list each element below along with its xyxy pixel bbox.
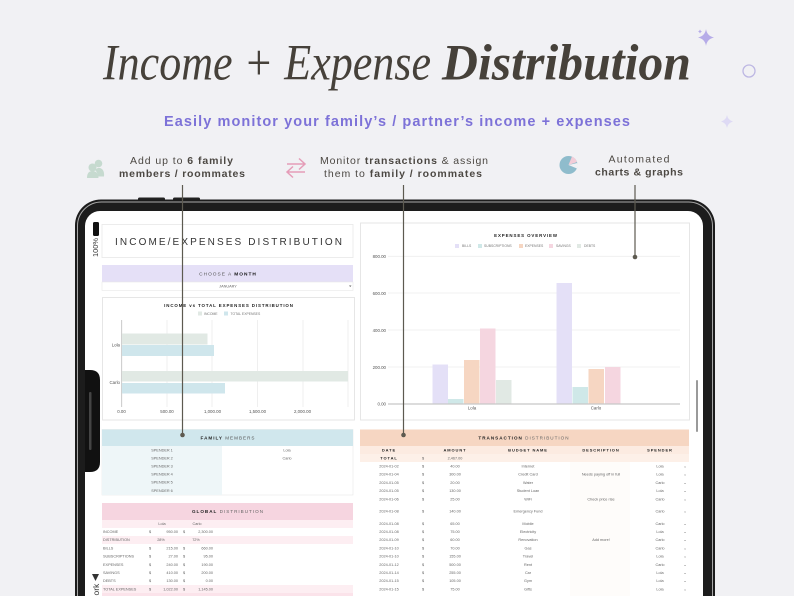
table rows: Carlo xyxy=(655,522,665,526)
panel: global distribution: $ xyxy=(183,530,186,534)
table rows: ⌄ xyxy=(683,497,687,501)
panel: global distribution: SUBSCRIPTIONS xyxy=(103,555,134,559)
panel: family members xyxy=(102,430,353,495)
panel: global distribution: BILLS xyxy=(103,546,114,550)
table rows: 20.00 xyxy=(450,481,460,485)
table rows: $ xyxy=(422,555,425,559)
table rows: Lola xyxy=(656,489,664,493)
table rows: ⌄ xyxy=(683,563,687,567)
tablet device xyxy=(75,198,715,596)
table rows: $ xyxy=(422,530,425,534)
callout line: transactions xyxy=(401,185,406,437)
table rows: Check price rise xyxy=(587,497,615,501)
table rows: Gym xyxy=(524,579,532,583)
table rows: 60.00 xyxy=(450,538,460,542)
table rows: $ xyxy=(422,563,425,567)
panel: transaction distribution: TRANSACTION DISTRIBUTION xyxy=(478,436,570,440)
column chart: 400.00 xyxy=(373,328,387,333)
panel: family members: SPENDER 4 xyxy=(151,473,173,477)
panel: global distribution: 200.00 xyxy=(201,571,213,575)
panel: global distribution: GLOBAL DISTRIBUTION xyxy=(192,509,264,514)
panel: family members: Carlo xyxy=(282,456,292,460)
table rows: $ xyxy=(422,481,425,485)
panel: transaction distribution xyxy=(360,430,689,596)
table rows: 2024-01-15 xyxy=(379,579,399,583)
panel: global distribution: 130.00 xyxy=(166,579,178,583)
table rows: 2024-01-05 xyxy=(379,489,399,493)
table rows: ⌄ xyxy=(683,555,687,559)
month selector: JANUARY xyxy=(219,284,237,288)
status bar: battery xyxy=(91,222,100,257)
panel: family members: SPENDER 3 xyxy=(151,464,173,468)
scrollbar xyxy=(696,380,698,432)
table rows: 2024-01-14 xyxy=(379,571,399,575)
panel: global distribution: $ xyxy=(183,546,186,550)
panel: global distribution: 0.00 xyxy=(206,579,213,583)
panel: global distribution: $ xyxy=(149,579,152,583)
table rows: Student Loan xyxy=(517,489,539,493)
table rows: Car xyxy=(525,571,532,575)
table rows: 2024-01-09 xyxy=(379,538,399,542)
title: Income + Expense xyxy=(102,36,431,92)
table rows: ⌄ xyxy=(683,473,687,477)
table rows: ⌄ xyxy=(683,579,687,583)
panel: family members: SPENDER 2 xyxy=(151,456,173,460)
table rows: $ xyxy=(422,489,425,493)
table rows: $ xyxy=(422,571,425,575)
table rows: $ xyxy=(422,538,425,542)
panel: global distribution: 28% xyxy=(157,538,165,542)
panel: global distribution: DEBTS xyxy=(103,579,116,583)
table rows: $ xyxy=(422,587,425,591)
panel: global distribution: $ xyxy=(183,555,186,559)
status bar: network xyxy=(91,574,101,596)
table rows: Carlo xyxy=(655,546,665,550)
table rows: Carlo xyxy=(655,510,665,514)
chart legend: BILLS xyxy=(462,244,472,248)
chart legend xyxy=(198,312,261,316)
table rows: ⌄ xyxy=(683,481,687,485)
callout line: charts xyxy=(633,185,637,259)
panel: global distribution: DISTRIBUTION xyxy=(103,538,130,542)
chart legend: SUBSCRIPTIONS xyxy=(484,244,512,248)
table header xyxy=(380,447,673,460)
table rows: Emergency Fund xyxy=(514,510,542,514)
horizontal bar chart: 0.00 xyxy=(117,409,126,414)
table rows: 105.00 xyxy=(449,579,461,583)
table rows: ⌄ xyxy=(683,464,687,468)
feature text: charts: Automated xyxy=(608,154,670,166)
panel: income vs expenses chart xyxy=(102,298,354,420)
table rows: $ xyxy=(422,579,425,583)
sheet title box: INCOME/EXPENSES DISTRIBUTION xyxy=(115,237,342,248)
table rows: 2024-01-15 xyxy=(379,587,399,591)
month selector xyxy=(102,265,353,290)
panel: global distribution: 660.00 xyxy=(201,546,213,550)
table rows: 2024-01-05 xyxy=(379,481,399,485)
table rows: 65.00 xyxy=(450,522,460,526)
title: Distribution xyxy=(441,36,691,92)
table rows: Lola xyxy=(656,473,664,477)
table rows: 2024-01-04 xyxy=(379,473,399,477)
table rows: 2024-01-10 xyxy=(379,555,399,559)
table rows: Lola xyxy=(656,464,664,468)
table rows: ⌄ xyxy=(683,571,687,575)
panel: global distribution: EXPENSES xyxy=(103,563,124,567)
table header: 2,467.00 xyxy=(448,456,462,460)
table rows: Carlo xyxy=(655,497,665,501)
table rows: 255.00 xyxy=(449,571,461,575)
table rows: 2024-01-12 xyxy=(379,563,399,567)
table rows: Gas xyxy=(525,546,532,550)
table rows: Gifts xyxy=(524,587,532,591)
table rows: $ xyxy=(422,510,425,514)
table rows: Renovation xyxy=(518,538,538,542)
table rows: 70.00 xyxy=(450,546,460,550)
column chart: Carlo xyxy=(591,406,602,410)
panel: global distribution: TOTAL EXPENSES xyxy=(103,587,137,591)
table header: AMOUNT xyxy=(444,447,466,452)
table rows: 2024-01-08 xyxy=(379,510,399,514)
column chart: 600.00 xyxy=(373,291,387,296)
chart legend: TOTAL EXPENSES xyxy=(230,312,261,316)
table rows: 2024-01-10 xyxy=(379,546,399,550)
panel: global distribution: 95.00 xyxy=(203,555,213,559)
table rows: ⌄ xyxy=(683,522,687,526)
month selector: CHOOSE A MONTH xyxy=(199,272,257,278)
horizontal bar chart xyxy=(110,320,348,414)
table rows: 500.00 xyxy=(449,563,461,567)
panel: global distribution: $ xyxy=(183,563,186,567)
table rows: Electricity xyxy=(520,530,536,534)
panel: global distribution: 72% xyxy=(192,538,200,542)
table rows: Lola xyxy=(656,579,664,583)
panel: global distribution: INCOME xyxy=(103,530,119,534)
horizontal bar chart: 1,000.00 xyxy=(204,409,222,414)
icon: decorative sparkles and circle xyxy=(698,29,755,128)
table header: DATE xyxy=(382,447,396,452)
table rows: WiFi xyxy=(524,497,532,501)
panel: global distribution: 950.00 xyxy=(166,530,178,534)
table rows: Lola xyxy=(656,555,664,559)
panel: global distribution: 215.00 xyxy=(166,546,178,550)
table rows: 2024-01-06 xyxy=(379,497,399,501)
panel: global distribution: $ xyxy=(149,587,152,591)
panel: global distribution: Lola xyxy=(158,522,166,526)
table rows: ⌄ xyxy=(683,530,687,534)
panel: global distribution: 27.00 xyxy=(168,555,178,559)
horizontal bar chart: Lola xyxy=(112,342,121,348)
table rows: 155.00 xyxy=(449,555,461,559)
table rows: Carlo xyxy=(655,563,665,567)
panel: global distribution: 240.00 xyxy=(166,563,178,567)
chart legend: INCOME xyxy=(204,312,218,316)
table rows: $ xyxy=(422,473,425,477)
panel: global distribution: 190.00 xyxy=(201,563,213,567)
callout line: family members xyxy=(180,185,185,437)
panel: global distribution: $ xyxy=(149,571,152,575)
table rows: Credit Card xyxy=(518,473,538,477)
panel: family members: SPENDER 5 xyxy=(151,481,173,485)
table rows: $ xyxy=(422,522,425,526)
feature text: transactions xyxy=(320,155,488,180)
panel: global distribution: 1,145.00 xyxy=(198,587,213,591)
table rows: $ xyxy=(422,464,425,468)
table rows: Internet xyxy=(522,464,535,468)
feature text: family members xyxy=(119,155,245,180)
horizontal bar chart: 500.00 xyxy=(160,409,174,414)
panel: family members: FAMILY MEMBERS xyxy=(201,436,255,440)
horizontal bar chart: 1,500.00 xyxy=(249,409,267,414)
table header: SPENDER xyxy=(647,447,673,452)
table header: $ xyxy=(422,456,425,460)
panel: global distribution xyxy=(102,503,353,596)
table rows: Mobile xyxy=(522,522,534,526)
title xyxy=(102,36,691,92)
table rows: ⌄ xyxy=(683,587,687,591)
status bar: network: ork xyxy=(91,583,101,596)
table rows: 40.00 xyxy=(450,464,460,468)
panel: global distribution: 2,300.00 xyxy=(198,530,213,534)
table rows: ⌄ xyxy=(683,546,687,550)
panel: global distribution: $ xyxy=(149,555,152,559)
feature text: family members: Add up to 6 family xyxy=(130,155,233,167)
panel: family members: SPENDER 6 xyxy=(151,489,173,493)
table rows: 300.00 xyxy=(449,473,461,477)
chart title: EXPENSES OVERVIEW xyxy=(494,233,558,238)
icon: people xyxy=(87,160,104,178)
table rows: 25.00 xyxy=(450,497,460,501)
panel: global distribution: $ xyxy=(149,546,152,550)
panel: global distribution: $ xyxy=(183,587,186,591)
panel: global distribution: 1,022.00 xyxy=(163,587,178,591)
table rows xyxy=(379,464,687,591)
chart legend: EXPENSES xyxy=(525,244,544,248)
panel: family members: SPENDER 1 xyxy=(151,448,173,452)
sheet title box xyxy=(102,224,353,258)
table rows: 75.00 xyxy=(450,530,460,534)
horizontal bar chart: 2,000.00 xyxy=(294,409,312,414)
feature text: transactions: them to family / roommates xyxy=(324,168,482,180)
panel: global distribution: $ xyxy=(183,571,186,575)
table rows: Lola xyxy=(656,530,664,534)
table rows: 2024-01-02 xyxy=(379,464,399,468)
table rows: $ xyxy=(422,546,425,550)
table rows: ⌄ xyxy=(683,489,687,493)
table rows: Water xyxy=(523,481,534,485)
table rows: Lola xyxy=(656,587,664,591)
panel: global distribution: $ xyxy=(183,579,186,583)
table rows: Carlo xyxy=(655,481,665,485)
table rows: Add more! xyxy=(592,538,610,542)
status bar: battery: 100% xyxy=(91,238,100,257)
chart legend xyxy=(455,244,596,248)
table header: DESCRIPTION xyxy=(582,447,620,452)
panel: global distribution: Carlo xyxy=(192,522,202,526)
panel: family members: Lola xyxy=(283,448,291,452)
chart title: INCOME vs TOTAL EXPENSES DISTRIBUTION xyxy=(164,303,294,308)
column chart: Lola xyxy=(468,406,477,410)
table rows: Travel xyxy=(523,555,533,559)
subtitle: Easily monitor your family’s / partner’s income + expenses xyxy=(164,114,630,130)
table rows: Rent xyxy=(524,563,533,567)
table rows: 140.00 xyxy=(449,510,461,514)
table rows: 2024-01-08 xyxy=(379,530,399,534)
table rows: 2024-01-08 xyxy=(379,522,399,526)
panel: expenses overview chart xyxy=(360,223,690,420)
table rows: Lola xyxy=(656,571,664,575)
chart legend: DEBTS xyxy=(584,244,596,248)
feature text: charts xyxy=(595,154,683,178)
icon: pie chart xyxy=(560,156,578,174)
table rows: Needs paying off in full xyxy=(582,473,620,477)
table rows: Carlo xyxy=(655,538,665,542)
table rows: 130.00 xyxy=(449,489,461,493)
panel: global distribution: 410.00 xyxy=(166,571,178,575)
table rows: ⌄ xyxy=(683,510,687,514)
table header: BUDGET NAME xyxy=(508,447,548,452)
column chart: 200.00 xyxy=(373,365,387,370)
table rows: 75.00 xyxy=(450,587,460,591)
feature text: family members: members / roommates xyxy=(119,168,245,180)
table rows: $ xyxy=(422,497,425,501)
horizontal bar chart: Carlo xyxy=(110,380,121,385)
panel: global distribution: $ xyxy=(149,530,152,534)
panel: global distribution: $ xyxy=(149,563,152,567)
panel: global distribution: SAVINGS xyxy=(103,571,120,575)
feature text: transactions: Monitor transactions & assign xyxy=(320,155,488,167)
icon: transfer arrows xyxy=(287,158,305,178)
column chart: 0.00 xyxy=(377,402,387,406)
feature text: charts: charts & graphs xyxy=(595,166,683,178)
column chart xyxy=(373,254,680,410)
chart legend: SAVINGS xyxy=(556,244,572,248)
table rows: ⌄ xyxy=(683,538,687,542)
column chart: 800.00 xyxy=(373,254,387,259)
table header: TOTAL xyxy=(380,456,398,460)
